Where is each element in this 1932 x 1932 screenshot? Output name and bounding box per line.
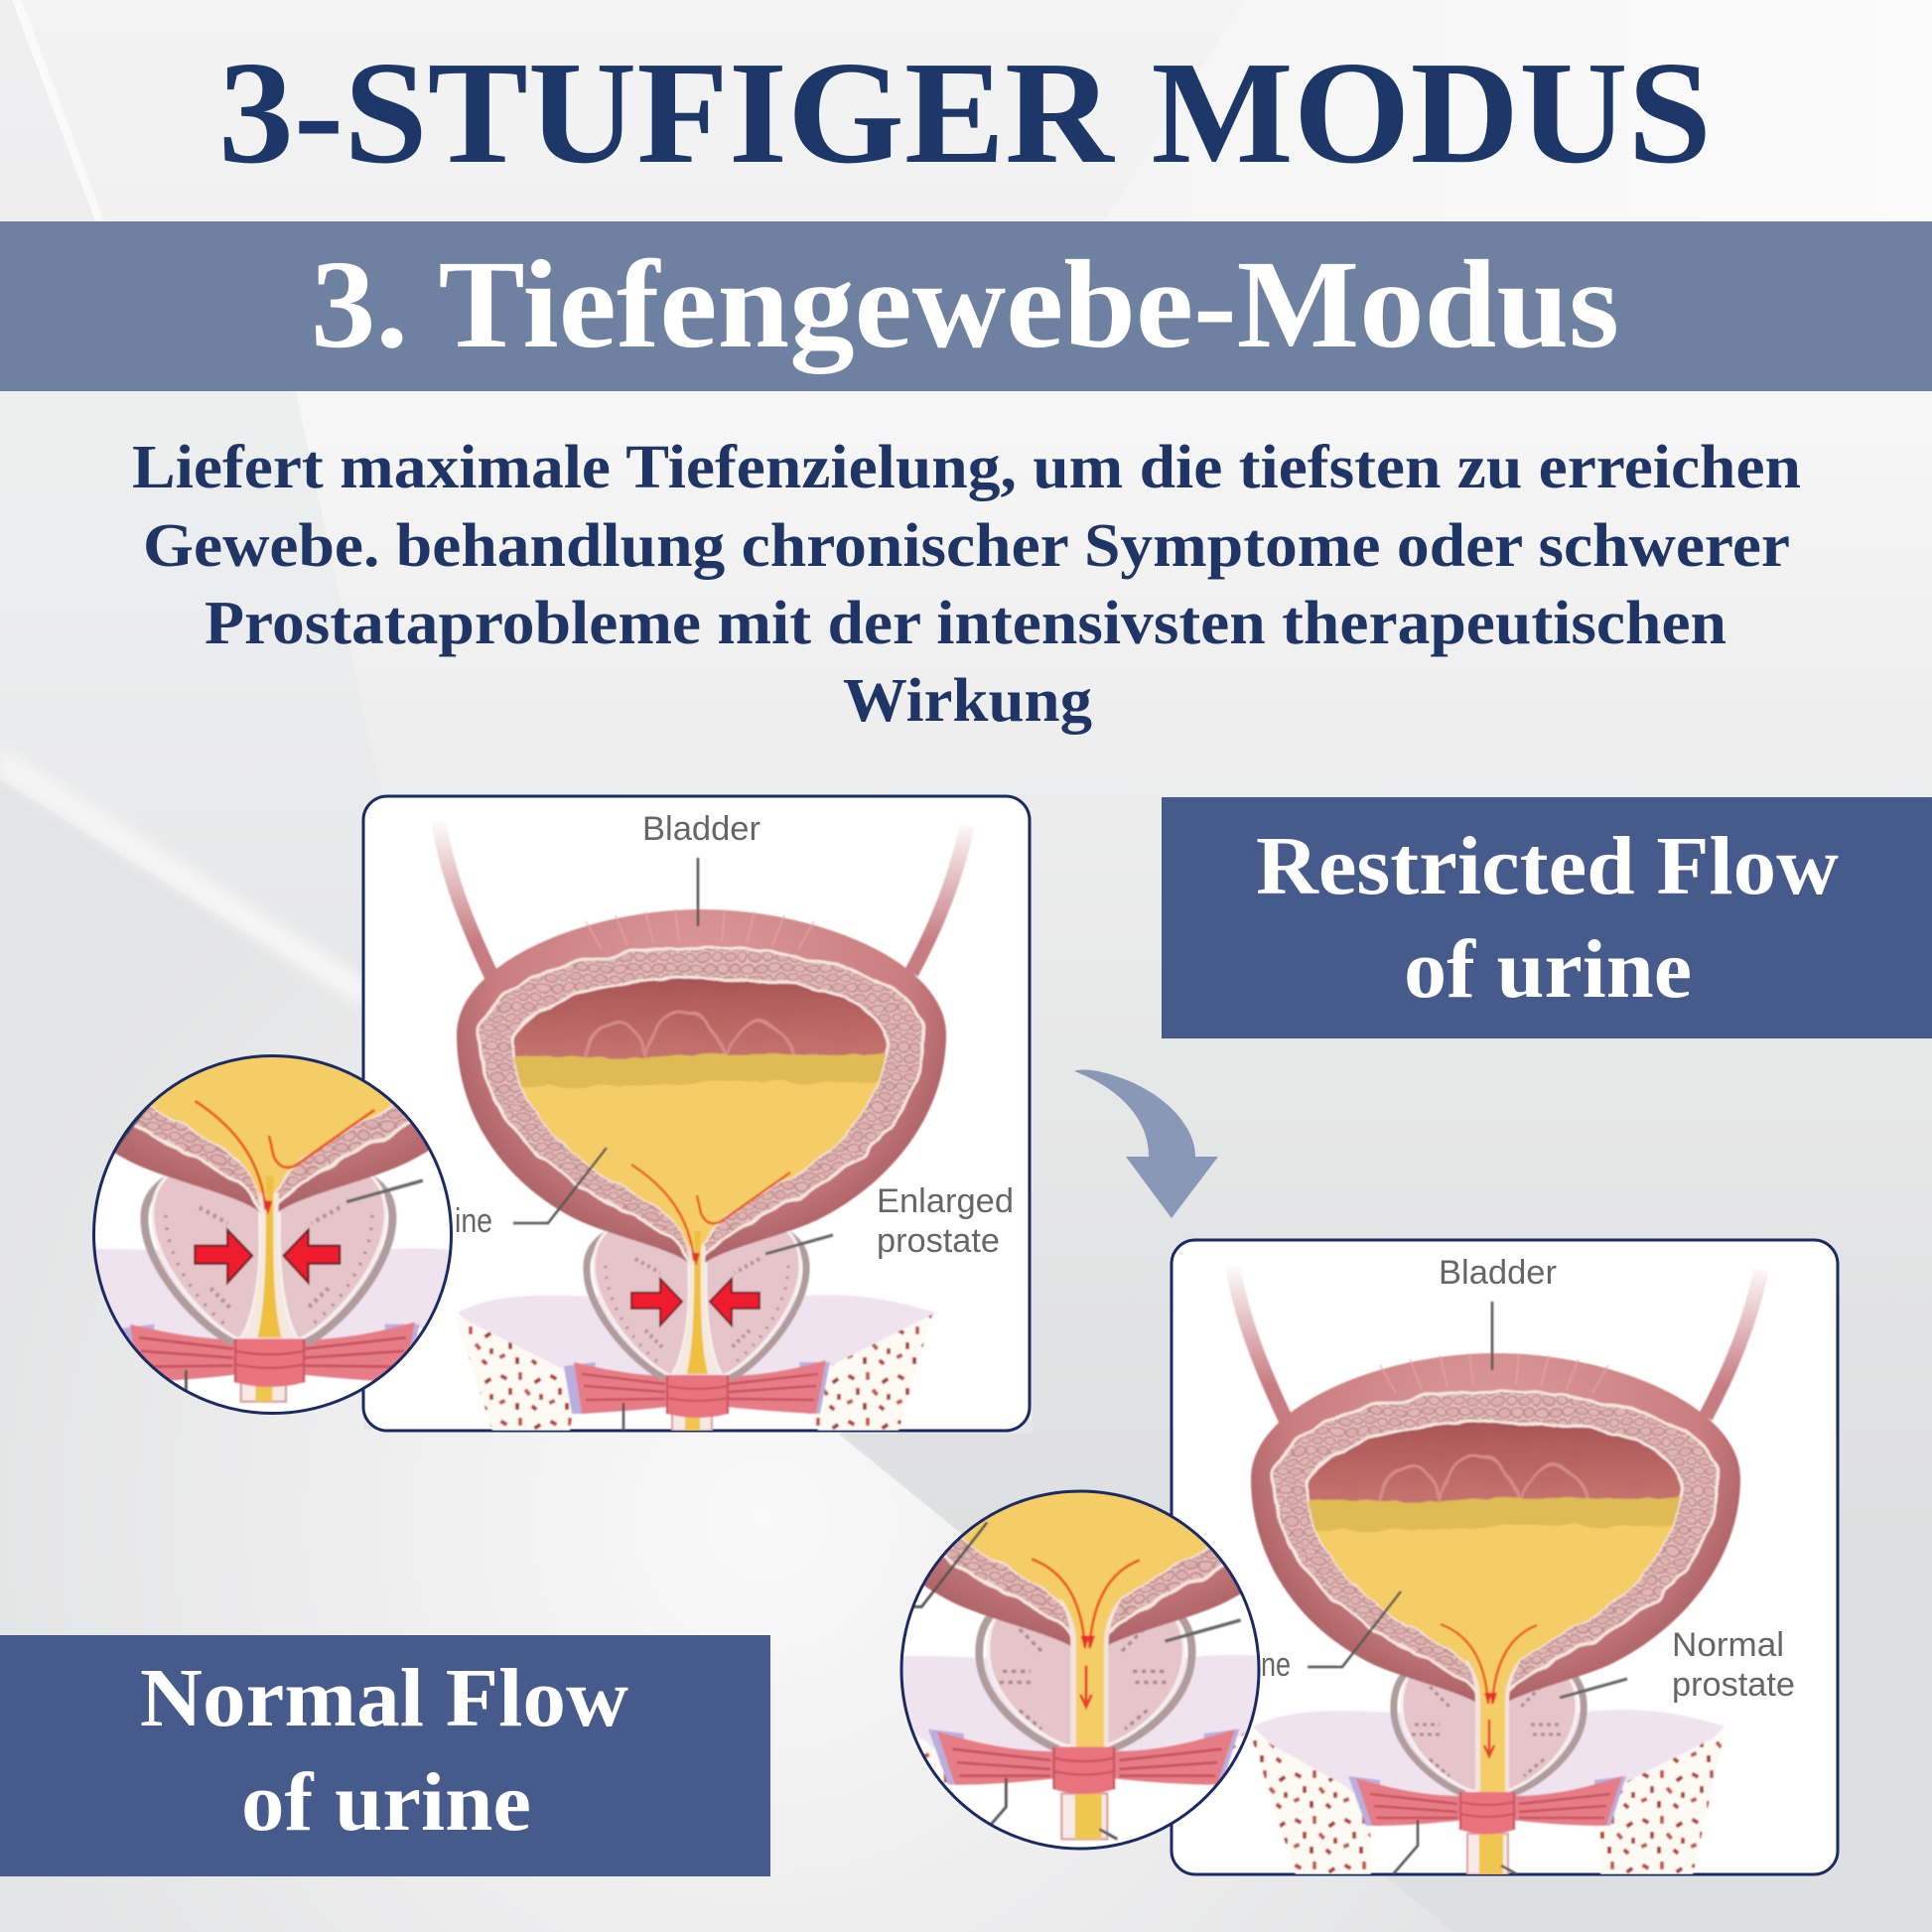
- description text block: Wirkung: [843, 667, 1092, 735]
- box heading text: Normal Flow: [140, 1652, 628, 1744]
- label: urine fragment: ine: [455, 1202, 492, 1240]
- box heading text: Restricted Flow: [1256, 820, 1839, 912]
- box heading text: of urine: [241, 1756, 531, 1849]
- description text block: Liefert maximale Tiefenzielung, um die tiefsten zu erreichen: [132, 434, 1801, 501]
- box: Restricted Flow of urine: [1162, 797, 1932, 1038]
- title: 3-STUFIGER MODUS: [218, 32, 1712, 195]
- magnifier circle: normal prostate close-up: [899, 1489, 1261, 1851]
- description text block: Prostataprobleme mit der intensivsten therapeutischen: [205, 590, 1726, 657]
- magnifier circle: enlarged prostate close-up: [92, 1054, 453, 1415]
- box heading text: of urine: [1404, 923, 1692, 1016]
- label: Normal prostate: Normal: [1672, 1626, 1784, 1664]
- banner heading text: 3. Tiefengewebe-Modus: [311, 235, 1619, 374]
- description text block: [132, 434, 1801, 735]
- label: urine fragment: ne: [1261, 1646, 1291, 1684]
- enlarged prostate anatomy illustration: [438, 818, 967, 1431]
- description text block: Gewebe. behandlung chronischer Symptome oder schwerer: [143, 512, 1790, 580]
- label: Bladder: Bladder: [642, 810, 760, 848]
- label: Enlarged prostate: prostate: [877, 1222, 1000, 1260]
- normal prostate anatomy illustration: [1232, 1262, 1761, 1874]
- banner: mode heading: [0, 221, 1932, 391]
- label: Enlarged prostate: Enlarged: [877, 1182, 1014, 1220]
- panel: normal prostate diagram: [1172, 1240, 1838, 1874]
- label: Normal prostate: prostate: [1672, 1666, 1795, 1704]
- panel: enlarged prostate diagram: [363, 796, 1030, 1431]
- arrow: curved down arrow: [1074, 1070, 1218, 1218]
- label: Bladder: Bladder: [1439, 1254, 1557, 1292]
- box: Normal Flow of urine: [0, 1635, 770, 1876]
